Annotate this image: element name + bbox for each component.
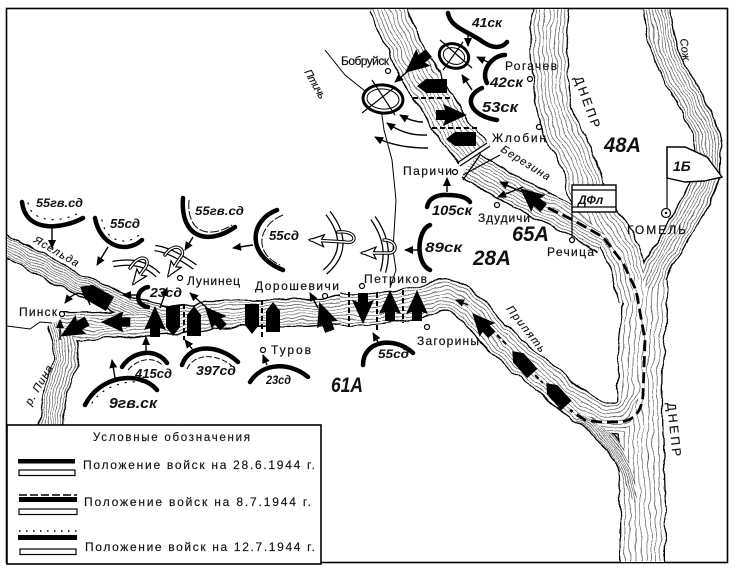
encirclement: Rogachev group <box>436 40 472 72</box>
box: Dnieper Flotilla <box>572 185 616 238</box>
unit labels: 23сд <box>265 373 291 387</box>
town names: Лунинец <box>187 274 240 288</box>
army labels: 48А <box>603 134 641 157</box>
legend row: 28.6.1944: Положение войск на 28.6.1944 г. <box>83 458 315 472</box>
thin movement arrows <box>52 35 523 378</box>
river names: ДНЕПР <box>571 74 603 130</box>
unit labels: 55сд <box>110 216 140 231</box>
Berezina crossing double lines <box>457 143 500 180</box>
legend row: 8.7.1944 <box>19 495 311 514</box>
legend row: 12.7.1944: Положение войск на 12.7.1944 г. <box>85 540 315 554</box>
town names: Речица <box>547 245 594 259</box>
legend row: 28.6.1944 <box>18 458 315 476</box>
dotted and white inner lines of the arcs <box>28 200 283 403</box>
town names <box>19 54 686 357</box>
unit labels: 41ск <box>471 15 503 30</box>
white looped arrows <box>130 232 395 283</box>
river names: Ясельда <box>31 234 81 270</box>
town names: Паричи <box>403 164 452 178</box>
town names: Петриков <box>364 272 427 286</box>
encirclement: Bobruisk group <box>362 80 404 115</box>
town names: Туров <box>271 343 311 357</box>
army arcs <box>22 13 507 405</box>
dashed front line along Berezina, Dnieper and Pripyat <box>548 208 645 422</box>
unit labels <box>36 15 524 412</box>
unit labels: 105ск <box>432 202 473 218</box>
unit labels: 42ск <box>489 74 524 90</box>
town names: Жлобин <box>492 131 546 145</box>
army labels <box>331 134 641 397</box>
flag: 1st Belorussian Front at Gomel: 1Б <box>673 158 691 174</box>
dashed front lines across rivers <box>184 98 543 383</box>
black attack arrows in the Pripyat <box>55 280 572 410</box>
unit labels: 89ск <box>425 239 463 255</box>
army labels: 28А <box>472 247 511 270</box>
town names: Загорины <box>417 334 479 348</box>
river names <box>23 38 692 457</box>
army labels: 65А <box>512 223 549 246</box>
river names: Припять <box>504 303 548 355</box>
unit labels: 415сд <box>134 366 172 381</box>
unit labels: 397сд <box>196 363 236 378</box>
town names: Дорошевичи <box>255 279 339 293</box>
thin river west of Pinsk <box>7 322 52 329</box>
unit labels: 9гв.ск <box>109 395 158 412</box>
unit labels: 23сд <box>149 285 182 300</box>
unit labels: 53ск <box>482 99 520 116</box>
legend row: 8.7.1944: Положение войск на 8.7.1944 г. <box>84 495 311 509</box>
black attack arrows in the Berezina <box>398 45 551 216</box>
white retreat bars <box>113 213 386 275</box>
town names: Бобруйск <box>341 54 390 68</box>
army labels: 61А <box>331 374 363 397</box>
unit labels: 55гв.сд <box>36 196 83 210</box>
box: Dnieper Flotilla: ДФл <box>577 193 604 207</box>
flag: 1st Belorussian Front at Gomel <box>662 147 722 218</box>
legend title: Условные обозначения <box>93 432 250 444</box>
river names: Березина <box>498 143 552 183</box>
town names: ГОМЕЛЬ <box>627 223 686 237</box>
thin river: Ptich <box>325 50 396 288</box>
legend row: 12.7.1944 <box>18 531 315 554</box>
legend box <box>7 425 321 564</box>
town names: Здудичи <box>478 211 530 225</box>
town names: Рогачев <box>505 59 557 73</box>
unit labels: 55гв.сд <box>195 204 244 218</box>
unit labels: 55сд <box>378 347 409 361</box>
town names: Пинск <box>19 305 58 319</box>
unit labels: 55сд <box>269 228 299 243</box>
river names: ДНЕПР <box>664 402 684 457</box>
river names: Птичь <box>301 68 328 101</box>
river names: Сож <box>677 38 692 62</box>
settlement markers <box>60 68 574 352</box>
river names: р. Пина <box>23 363 56 408</box>
